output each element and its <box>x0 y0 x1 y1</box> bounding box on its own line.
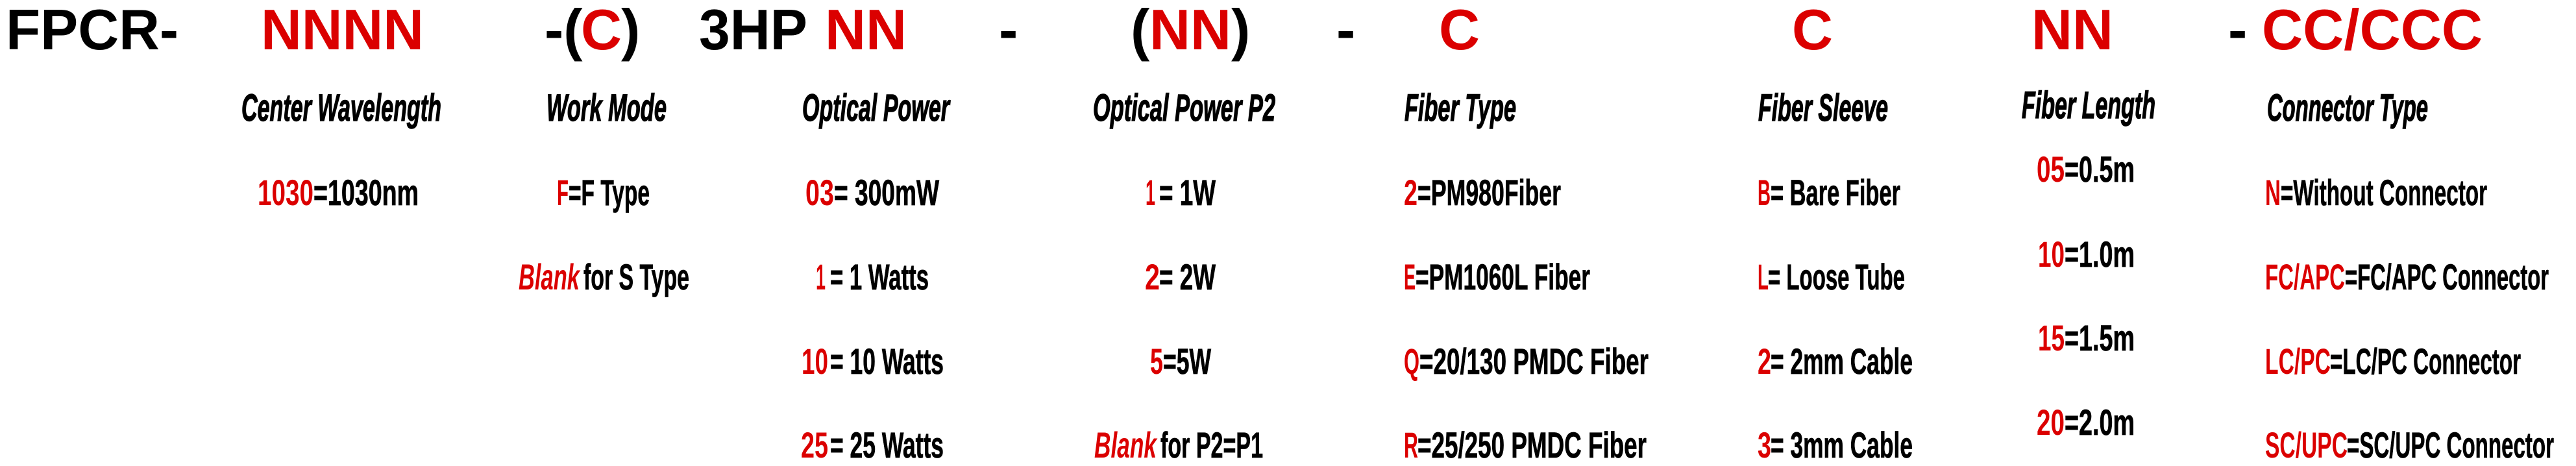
option: R: R <box>1404 424 1418 465</box>
heading: Optical Power P2: Optical Power P2 <box>1093 87 1275 129</box>
option: E: E <box>1404 256 1416 297</box>
option: 1: 1 <box>816 256 826 297</box>
option: 2 <box>1404 172 1561 213</box>
option: 1: = 1W <box>1159 172 1216 213</box>
option: 05: 05 <box>2037 149 2065 190</box>
option: L <box>1758 256 1905 297</box>
option: 10: 10 <box>802 341 828 382</box>
option: 10: =1.0m <box>2065 234 2135 275</box>
option: 2: =PM980Fiber <box>1417 172 1561 213</box>
panel: work mode <box>519 87 689 297</box>
option: 25: 25 <box>801 424 828 465</box>
heading: Optical Power: Optical Power <box>802 87 951 129</box>
option: LC/PC: LC/PC <box>2265 341 2331 382</box>
option: 05 <box>2037 149 2135 190</box>
option: 1: 1 <box>1146 172 1155 213</box>
option: L: = Loose Tube <box>1768 256 1905 297</box>
option: 5: =5W <box>1163 341 1211 382</box>
option: 10: 10 <box>2038 234 2065 275</box>
option: 05: =0.5m <box>2065 149 2135 190</box>
option: blank for S type <box>519 256 689 297</box>
option: blank for P2=P1 <box>1094 424 1263 465</box>
option: B: = Bare Fiber <box>1771 172 1900 213</box>
option: 1030: =1030nm <box>313 172 419 213</box>
option: E: =PM1060L Fiber <box>1416 256 1590 297</box>
panel: connector type <box>2265 87 2554 465</box>
title: part number code <box>6 0 2483 62</box>
option: R <box>1404 424 1647 465</box>
option: 2 <box>1758 341 1913 382</box>
option: 03 <box>805 172 939 213</box>
option: blank for S type: for S Type <box>583 256 689 297</box>
panel: fiber length <box>2022 84 2155 443</box>
option: 2: 2 <box>1145 256 1160 297</box>
heading: Work Mode: Work Mode <box>546 87 667 129</box>
heading: Connector Type: Connector Type <box>2267 87 2428 129</box>
option: F type: =F Type <box>569 172 650 213</box>
option: 3: = 3mm Cable <box>1771 424 1913 465</box>
option: SC/UPC: SC/UPC <box>2265 424 2348 465</box>
option: blank for P2=P1: for P2=P1 <box>1160 424 1263 465</box>
option: L: L <box>1758 256 1769 297</box>
option: 1 <box>1146 172 1216 213</box>
panel: center wavelength <box>241 87 441 213</box>
option: 2: = 2mm Cable <box>1771 341 1913 382</box>
option: 25: = 25 Watts <box>830 424 944 465</box>
option: 1030: 1030 <box>258 172 313 213</box>
option: 1030 <box>258 172 419 213</box>
panel: optical power <box>801 87 951 465</box>
option: R: =25/250 PMDC Fiber <box>1417 424 1647 465</box>
option: 2: 2 <box>1758 341 1771 382</box>
heading: Fiber Type: Fiber Type <box>1405 87 1516 129</box>
option: N: N <box>2265 172 2281 213</box>
option: 5: 5 <box>1150 341 1163 382</box>
option: Q <box>1404 341 1649 382</box>
option: 10 <box>802 341 944 382</box>
option: 3: 3 <box>1758 424 1771 465</box>
option: blank for S type: Blank <box>519 256 581 297</box>
heading: Fiber Length: Fiber Length <box>2022 84 2155 127</box>
option: 25 <box>801 424 944 465</box>
option: F type: F <box>557 172 569 213</box>
option: N <box>2265 172 2487 213</box>
option: 15: =1.5m <box>2065 317 2135 358</box>
option: FC/APC: FC/APC <box>2265 256 2345 297</box>
option: F type <box>557 172 650 213</box>
option: 3 <box>1758 424 1913 465</box>
option: E <box>1404 256 1590 297</box>
option: 1 <box>816 256 929 297</box>
option: 5 <box>1150 341 1211 382</box>
option: 2: 2 <box>1404 172 1417 213</box>
option: 10 <box>2038 234 2135 275</box>
option: 03: = 300mW <box>834 172 939 213</box>
option: 20: =2.0m <box>2065 402 2135 443</box>
option: 2 <box>1145 256 1216 297</box>
option: 2: = 2W <box>1159 256 1216 297</box>
panel: optical power P2 <box>1093 87 1275 465</box>
option: LC/PC <box>2265 341 2521 382</box>
option: Q: =20/130 PMDC Fiber <box>1419 341 1649 382</box>
heading: Fiber Sleeve: Fiber Sleeve <box>1758 87 1888 129</box>
option: 15: 15 <box>2038 317 2065 358</box>
option: B: B <box>1758 172 1771 213</box>
panel: fiber sleeve <box>1758 87 1913 465</box>
option: Q: Q <box>1404 341 1419 382</box>
option: blank for P2=P1: Blank <box>1094 424 1158 465</box>
option: 10: = 10 Watts <box>830 341 944 382</box>
panel: fiber type <box>1404 87 1649 465</box>
option: 1: = 1 Watts <box>830 256 929 297</box>
option: B <box>1758 172 1900 213</box>
option: 15 <box>2038 317 2135 358</box>
option: 20 <box>2037 402 2135 443</box>
heading: Center Wavelength: Center Wavelength <box>241 87 441 129</box>
option: 03: 03 <box>805 172 834 213</box>
option: 20: 20 <box>2037 402 2065 443</box>
option: SC/UPC <box>2265 424 2554 465</box>
option: FC/APC <box>2265 256 2549 297</box>
